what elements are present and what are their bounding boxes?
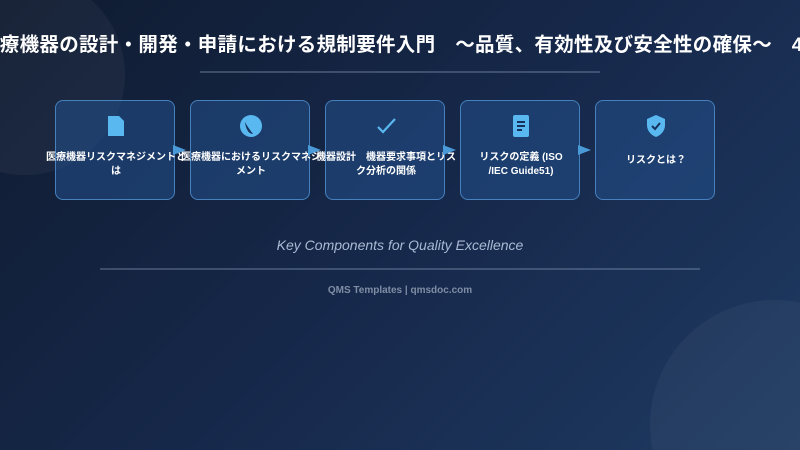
icon: leaf circle (240, 115, 262, 137)
label 5: リスクとは？ (626, 155, 686, 166)
label 4 (479, 151, 563, 177)
card 2 (190, 100, 310, 200)
subtitle: Key Components for Quality Excellence (277, 237, 523, 253)
title: 医療機器の設計・開発・申請における規制要件入門 ～品質、有効性及び安全性の確保～ 4 (0, 34, 800, 56)
arrow 3 (443, 145, 456, 155)
icon: document (108, 116, 124, 136)
label 4: /IEC Guide51) (488, 166, 554, 177)
arrow 4 (578, 145, 591, 155)
label 3: 機器設計 機器要求事項とリスク分析の関係 (316, 152, 456, 177)
arrow 1 (173, 145, 186, 155)
card 4 (460, 100, 580, 200)
card 5 (595, 100, 715, 200)
icon: shield check (647, 115, 665, 137)
label 2: 医療機器におけるリスクマネジメント (181, 152, 321, 177)
footer: QMS Templates | qmsdoc.com (328, 285, 472, 296)
card 1 (55, 100, 175, 200)
label 4: リスクの定義 (ISO (479, 152, 563, 163)
arrow 2 (308, 145, 321, 155)
icon: check (377, 118, 396, 134)
icon: list doc (513, 115, 529, 137)
card 3 (325, 100, 445, 200)
label 1: 医療機器リスクマネジメントとは (46, 152, 186, 177)
